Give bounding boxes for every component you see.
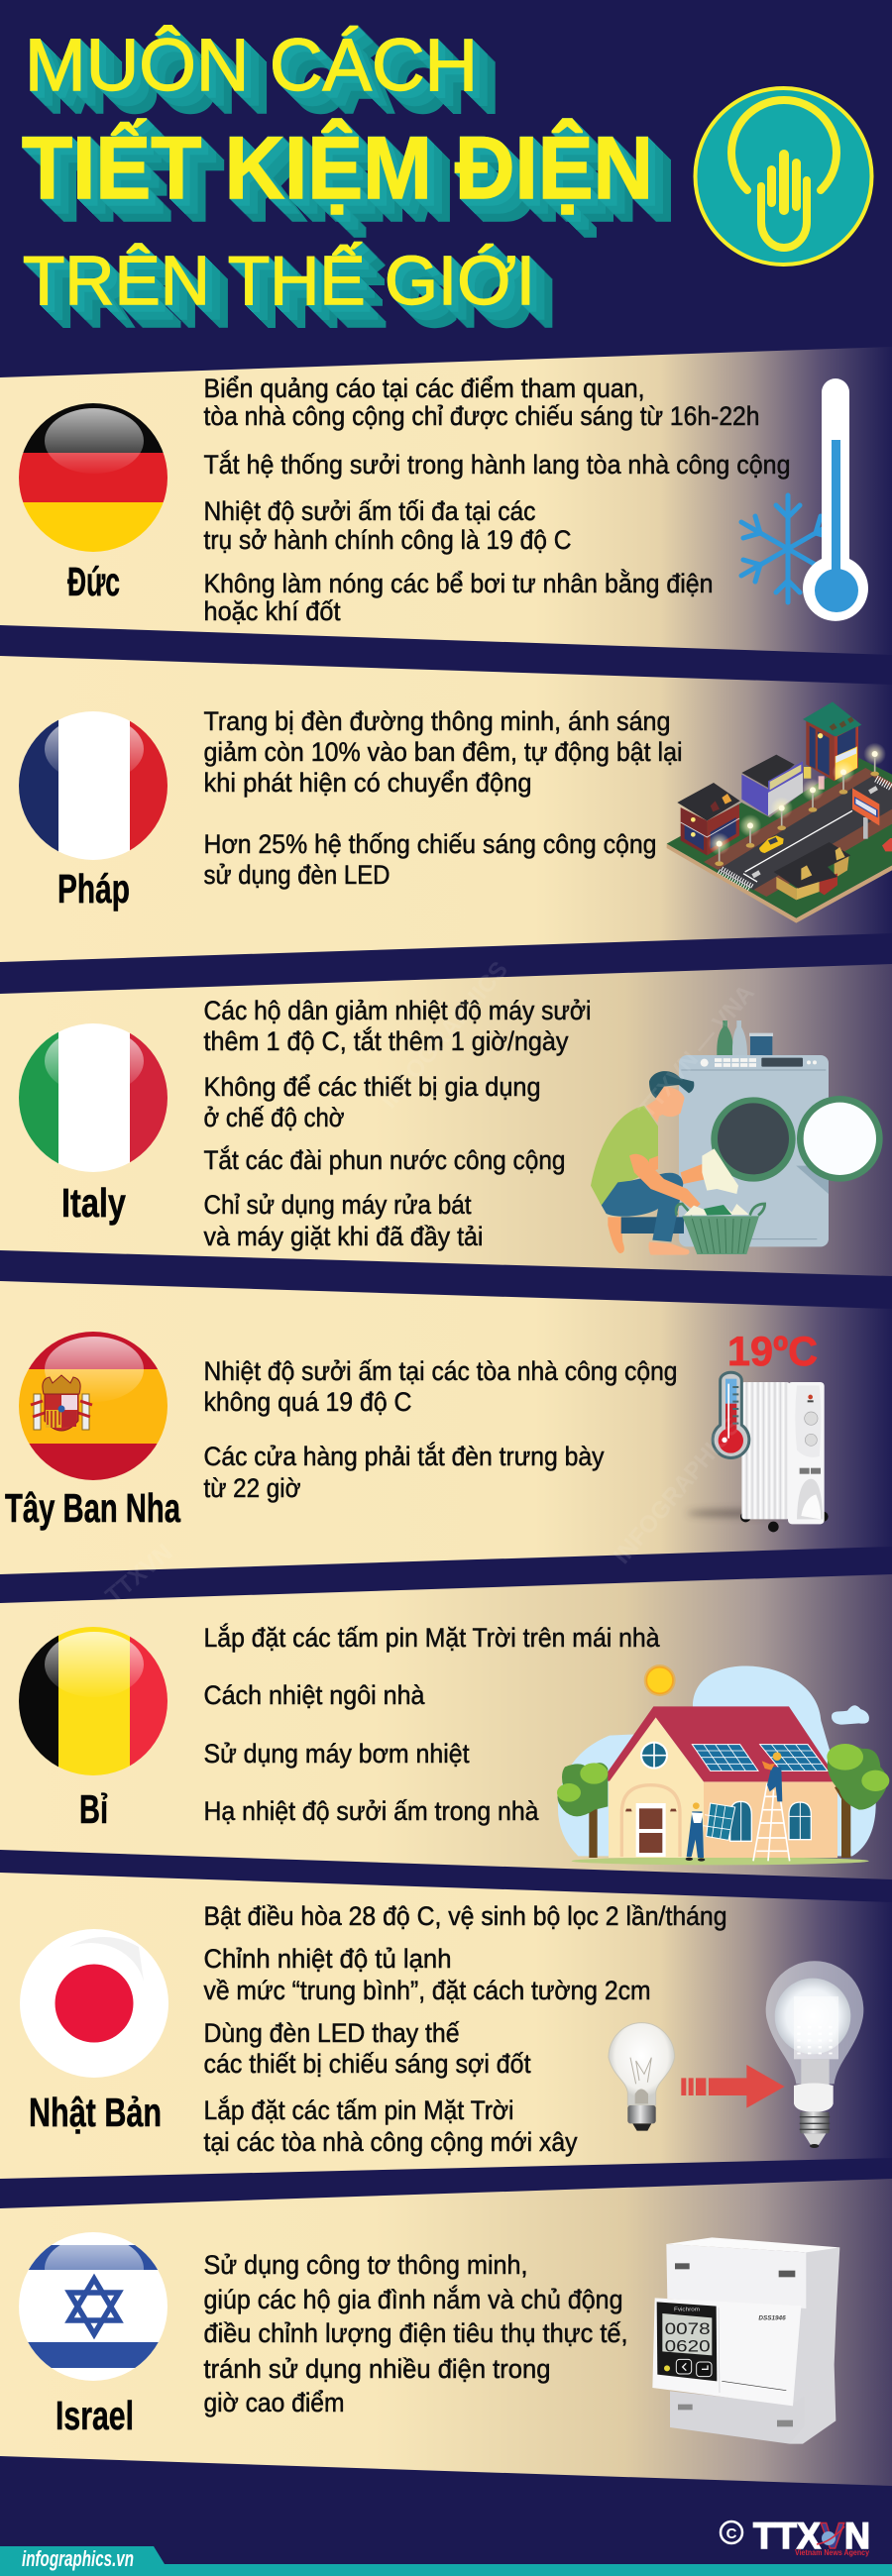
flag: Spain xyxy=(19,1332,167,1481)
measures: Nhiệt độ sưởi ấm tại các tòa nhà công cộng xyxy=(204,1356,678,1386)
country name: Bỉ xyxy=(79,1786,108,1832)
measures: Sử dụng máy bơm nhiệt xyxy=(204,1739,470,1769)
walls xyxy=(704,1781,837,1858)
measures: Hạ nhiệt độ sưởi ấm trong nhà xyxy=(204,1796,539,1826)
measures xyxy=(204,1356,678,1503)
measures xyxy=(204,1623,660,1826)
solar worker with panel xyxy=(707,1803,735,1840)
basket xyxy=(676,1204,765,1216)
panel: Pháp xyxy=(0,656,892,962)
tall brick building xyxy=(806,720,835,781)
measures: Không làm nóng các bể bơi tư nhân bằng điện xyxy=(204,569,714,598)
illustration: smart meter: 0620 xyxy=(665,2336,711,2355)
coat of arms xyxy=(31,1375,92,1431)
measures: giảm còn 10% vào ban đêm, tự động bật lại xyxy=(204,737,682,767)
illustration: man at washing machine xyxy=(591,1020,883,1255)
country name: Nhật Bản xyxy=(29,2090,162,2135)
measures: Tắt hệ thống sưởi trong hành lang tòa nhà công cộng xyxy=(204,450,791,480)
measures: về mức “trung bình”, đặt cách tường 2cm xyxy=(204,1976,650,2005)
panel background xyxy=(0,1873,892,2179)
measures xyxy=(204,996,591,1251)
arrow xyxy=(681,2065,785,2108)
panel: Israel xyxy=(0,2179,892,2486)
billboard xyxy=(863,817,868,839)
title xyxy=(22,24,653,319)
watermarks: TTXVN — VNA xyxy=(633,980,760,1124)
small house xyxy=(776,877,796,900)
measures: và máy giặt khi đã đầy tải xyxy=(204,1222,484,1251)
solar panels xyxy=(692,1745,758,1771)
title: TIẾT KIỆM ĐIỆN xyxy=(22,118,653,217)
country name: Pháp xyxy=(57,866,130,912)
measures: giúp các hộ gia đình nắm và chủ động xyxy=(204,2285,622,2314)
panel background xyxy=(0,1281,892,1574)
icon: light bulb with hand xyxy=(696,88,872,265)
panel: Nhật Bản xyxy=(0,1873,892,2179)
illustration: smart meter: Fvichrom xyxy=(674,2308,701,2313)
measures: Nhiệt độ sưởi ấm tối đa tại các xyxy=(204,496,535,526)
panel: Bỉ xyxy=(0,1574,892,1879)
flag: Germany xyxy=(19,403,167,552)
flag: Japan xyxy=(20,1929,168,2078)
measures: Bật điều hòa 28 độ C, vệ sinh bộ lọc 2 lần/tháng xyxy=(204,1901,727,1931)
panel: Tây Ban Nha xyxy=(0,1281,892,1574)
logo: TTXVN: C xyxy=(726,2525,737,2542)
lamps xyxy=(708,832,730,866)
country name: Đức xyxy=(67,559,120,604)
country name: Tây Ban Nha xyxy=(5,1485,181,1531)
illustration: smart meter xyxy=(652,2237,839,2444)
measures: Chỉnh nhiệt độ tủ lạnh xyxy=(204,1944,452,1974)
measures: Các hộ dân giảm nhiệt độ máy sưởi xyxy=(204,996,591,1025)
measures: Lắp đặt các tấm pin Mặt Trời trên mái nhà xyxy=(204,1623,660,1653)
measures: Cách nhiệt ngôi nhà xyxy=(204,1680,425,1710)
measures: các thiết bị chiếu sáng sợi đốt xyxy=(204,2049,531,2079)
logo: TTXVN: Vietnam News Agency xyxy=(795,2548,869,2557)
title: MUÔN CÁCH xyxy=(25,24,478,106)
logo: TTXVN: TTXVN xyxy=(753,2516,870,2556)
measures: tòa nhà công cộng chỉ được chiếu sáng từ 16h-22h xyxy=(204,401,759,431)
flag: Belgium xyxy=(19,1627,167,1775)
measures xyxy=(204,1901,727,2157)
icon: thermometer xyxy=(803,378,868,621)
watermarks: INFOGRAPHICS xyxy=(376,957,513,1114)
measures: không quá 19 độ C xyxy=(204,1387,412,1417)
panel background xyxy=(0,2179,892,2486)
measures: khi phát hiện có chuyển động xyxy=(204,768,531,798)
ladder xyxy=(753,1783,790,1861)
footer bar xyxy=(0,2546,892,2576)
measures xyxy=(204,2250,628,2417)
flag: France xyxy=(19,711,167,860)
flag: Italy xyxy=(19,1023,167,1172)
country name: Italy xyxy=(61,1180,126,1226)
panel background xyxy=(0,964,892,1276)
measures: trụ sở hành chính công là 19 độ C xyxy=(204,525,571,555)
watermarks xyxy=(101,957,760,1610)
illustration: smart city street xyxy=(667,701,892,923)
measures: Các cửa hàng phải tắt đèn trưng bày xyxy=(204,1442,605,1471)
measures: Chỉ sử dụng máy rửa bát xyxy=(204,1190,472,1220)
measures: Hơn 25% hệ thống chiếu sáng công cộng xyxy=(204,829,656,859)
measures: tại các tòa nhà công cộng mới xây xyxy=(204,2127,578,2157)
measures: từ 22 giờ xyxy=(204,1473,301,1503)
measures: điều chỉnh lượng điện tiêu thụ thực tế, xyxy=(204,2318,628,2348)
LED bulb xyxy=(766,1961,863,2148)
panel background xyxy=(0,1574,892,1879)
measures: ở chế độ chờ xyxy=(204,1103,345,1132)
panel background xyxy=(0,656,892,962)
trees xyxy=(589,1800,598,1858)
title: TRÊN THẾ GIỚI xyxy=(23,242,535,319)
measures xyxy=(204,706,682,890)
flag: Israel xyxy=(19,2232,167,2381)
man xyxy=(608,1217,624,1253)
measures: Trang bị đèn đường thông minh, ánh sáng xyxy=(204,706,670,736)
website: infographics.vn xyxy=(22,2546,134,2571)
incandescent bulb xyxy=(609,2023,675,2131)
illustration: smart meter: DSS1946 xyxy=(758,2315,786,2322)
measures: Lắp đặt các tấm pin Mặt Trời xyxy=(204,2095,513,2125)
measures: tránh sử dụng nhiều điện trong xyxy=(204,2354,551,2384)
measures: Biển quảng cáo tại các điểm tham quan, xyxy=(204,374,644,403)
windows xyxy=(730,1801,751,1841)
measures: sử dụng đèn LED xyxy=(204,860,390,890)
country name: Israel xyxy=(56,2393,134,2438)
watermarks: INFOGRAPHICS xyxy=(609,1413,746,1569)
illustration: house with solar panels xyxy=(557,1664,889,1865)
measures: Tắt các đài phun nước công cộng xyxy=(204,1145,565,1175)
meter readings: 0078 xyxy=(665,2319,711,2338)
watermarks: TTXVN xyxy=(101,1539,177,1610)
icon: snowflake xyxy=(741,495,835,602)
measures: Không để các thiết bị gia dụng xyxy=(204,1072,541,1102)
panel: Italy xyxy=(0,964,892,1276)
red house xyxy=(681,807,707,855)
illustration: incandescent bulb to LED bulb xyxy=(609,1961,863,2148)
temperature label: 19ºC xyxy=(727,1328,818,1374)
measures: thêm 1 độ C, tắt thêm 1 giờ/ngày xyxy=(204,1026,569,1056)
illustration: oil heater and thermometer xyxy=(687,1372,829,1532)
worker on ladder xyxy=(767,1767,782,1801)
car xyxy=(759,835,784,853)
measures: hoặc khí đốt xyxy=(204,596,341,626)
measures xyxy=(204,374,791,626)
measures: Sử dụng công tơ thông minh, xyxy=(204,2250,527,2280)
panel background xyxy=(0,347,892,655)
measures: giờ cao điểm xyxy=(204,2388,345,2417)
purple market xyxy=(741,775,768,815)
measures: Dùng đèn LED thay thế xyxy=(204,2018,460,2048)
panel: Đức xyxy=(0,347,892,655)
